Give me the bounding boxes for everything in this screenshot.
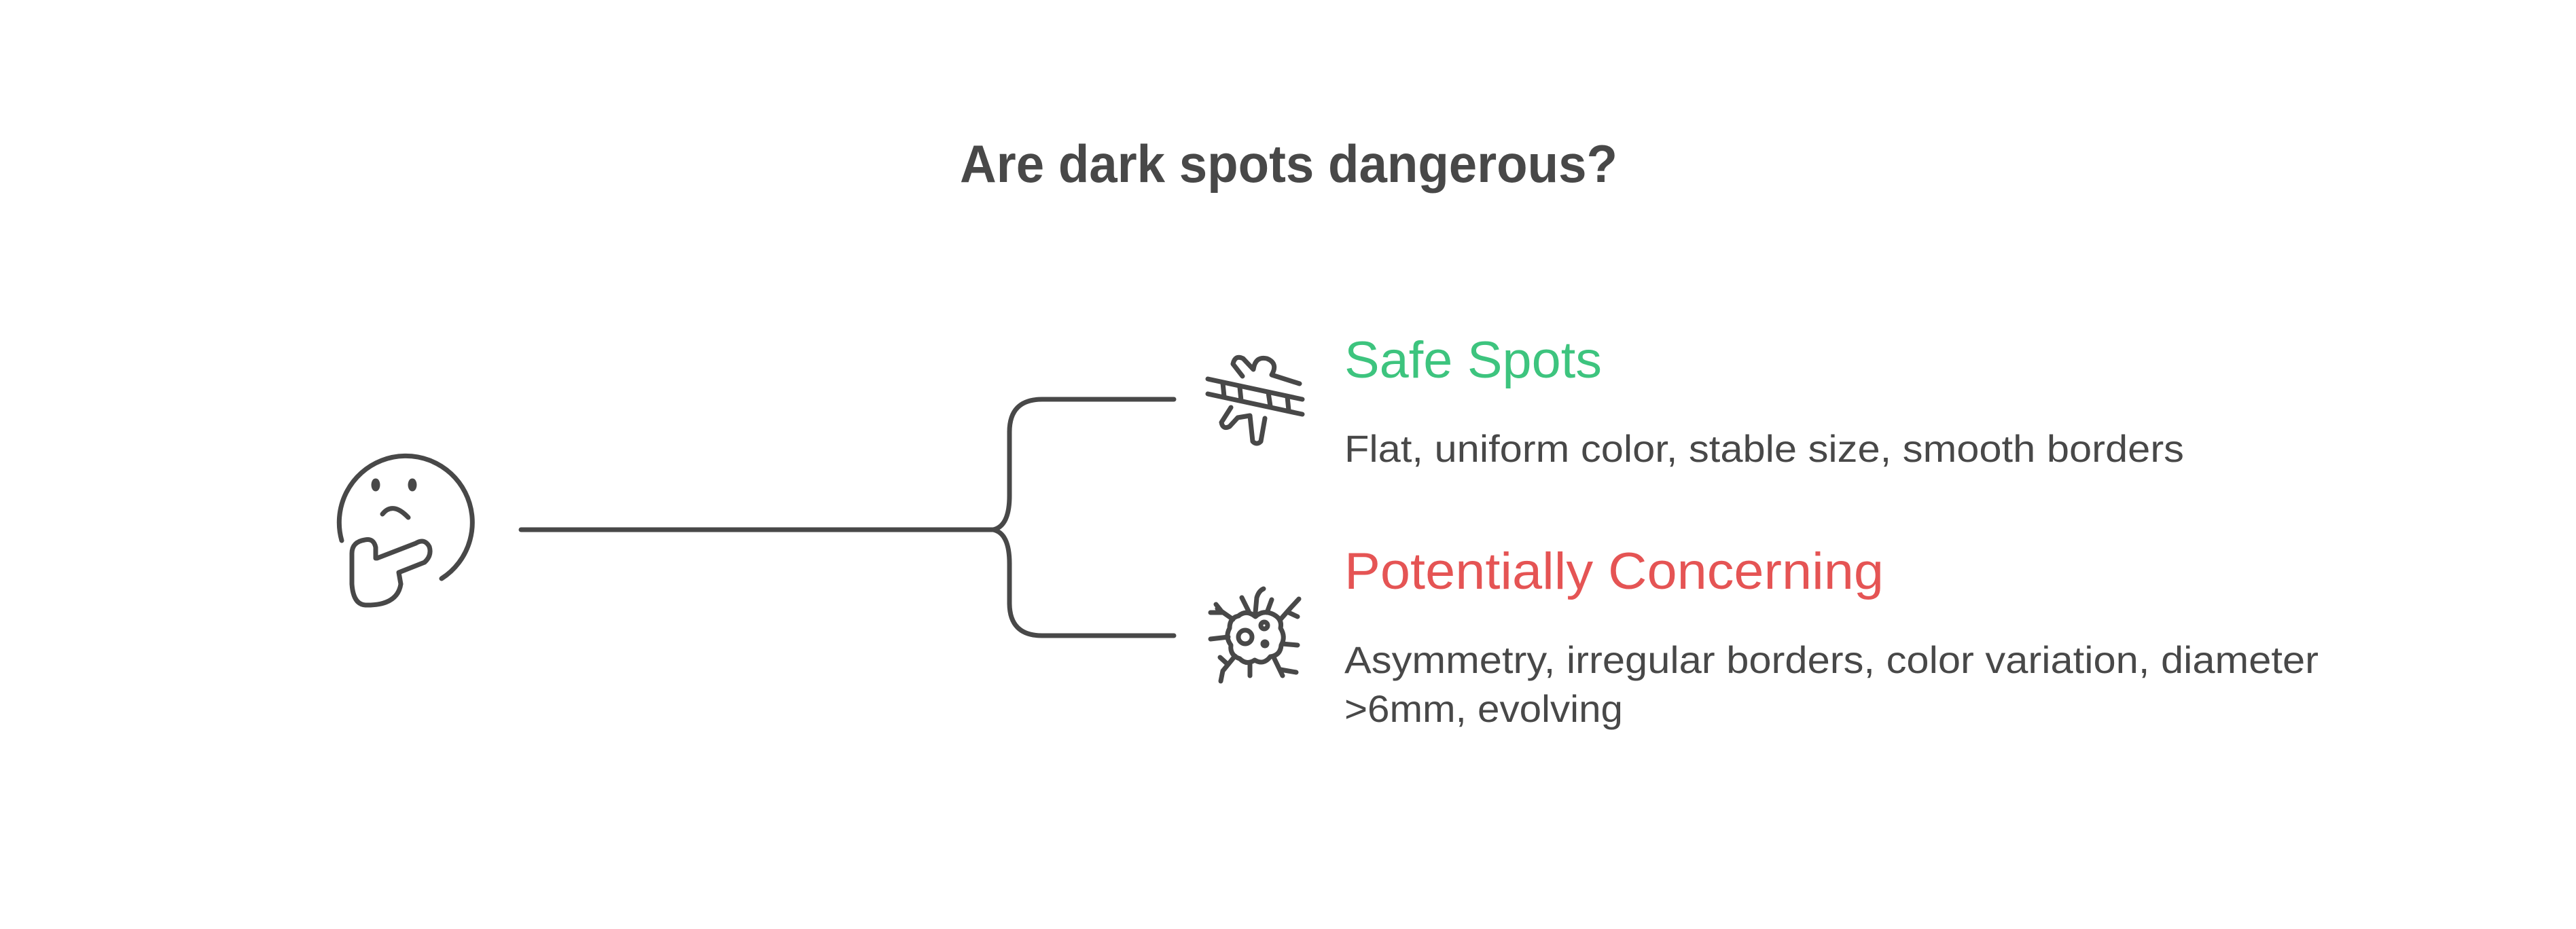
icon: irregular cell (concerning) [1211,589,1299,681]
icon: ladder (safe) [1208,357,1302,443]
text: safe description: Flat, uniform color, stable size, smooth borders [1344,427,2184,470]
text: concerning description: Asymmetry, irregular borders, color variation, diameter [1344,638,2319,681]
heading: Potentially Concerning: Potentially Concerning [1344,543,1884,600]
title: Are dark spots dangerous? [960,134,1617,194]
icon: thinking face [339,456,472,605]
heading: Safe Spots: Safe Spots [1344,331,1602,389]
text: concerning description [1344,638,2319,730]
connector: branch lines [521,399,1174,636]
text: concerning description: >6mm, evolving [1344,687,1623,730]
